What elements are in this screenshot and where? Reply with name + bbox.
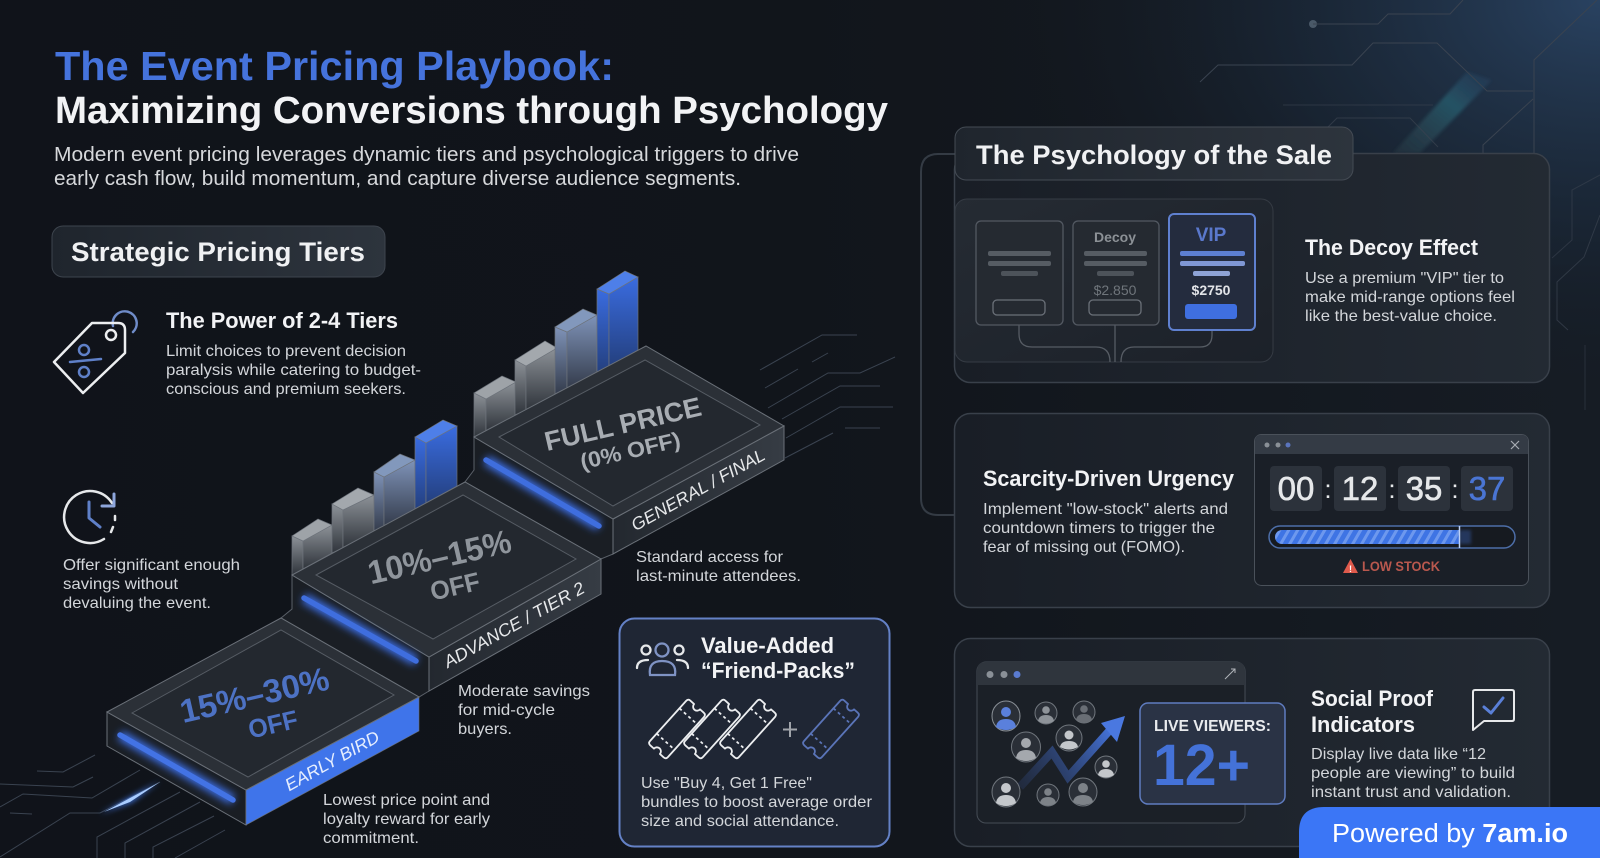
platform: early bird tier: OFF [245, 704, 301, 744]
timer digits: : [1388, 474, 1396, 504]
timer digits: 00 [1278, 470, 1314, 507]
card: decoy option: Decoy [1094, 229, 1136, 245]
platform: full price tier: (0% OFF) [578, 427, 683, 474]
card: decoy option [1073, 221, 1159, 325]
text: friend packs body [641, 775, 873, 830]
text: social proof [1311, 686, 1515, 801]
icon: tickets plus one free [648, 699, 860, 759]
subtitle text block: Modern event pricing leverages dynamic tiers and psychological triggers to drive [54, 143, 799, 166]
pricing table illustration [955, 199, 1273, 362]
text: friend packs body: size and social attendance. [641, 813, 839, 830]
platform: full price tier [465, 346, 784, 559]
browser window with avatars [977, 662, 1245, 823]
text: power of 2-4 tiers: Limit choices to prevent decision [166, 343, 406, 360]
text: scarcity: Implement "low-stock" alerts and [983, 501, 1228, 518]
text: early bird description [323, 792, 490, 847]
icon: verified chat bubble [1473, 690, 1514, 730]
title: The Event Pricing Playbook: [55, 43, 614, 89]
text: social proof: Display live data like “12 [1311, 746, 1486, 763]
card: basic option [976, 221, 1063, 325]
timer digits: 37 [1469, 470, 1505, 507]
callout: live viewers [1140, 703, 1285, 804]
text: savings note: Offer significant enough [63, 557, 240, 574]
text: decoy effect: like the best-value choice. [1305, 308, 1497, 325]
platform: full price tier: FULL PRICE [542, 392, 704, 457]
text: social proof: instant trust and validation. [1311, 784, 1511, 801]
text: friend packs heading: Value-Added [701, 633, 834, 658]
text: advance tier description: Moderate savings [458, 683, 590, 700]
heading: psychology of the sale: The Psychology of the Sale [976, 140, 1332, 170]
callout: live viewers: LIVE VIEWERS: [1154, 718, 1271, 735]
icon: group of people [637, 644, 688, 675]
callout: live viewers: 12+ [1153, 733, 1250, 798]
card: VIP option [1169, 214, 1255, 330]
platform: full price tier: GENERAL / FINAL [628, 445, 769, 535]
text: social proof: Indicators [1311, 712, 1415, 737]
rising trend arrow [1020, 716, 1125, 787]
text: general tier description: Standard access for [636, 549, 784, 566]
panel: social proof [954, 638, 1550, 846]
platform: advance tier: ADVANCE / TIER 2 [439, 578, 588, 672]
timer digits [1270, 466, 1513, 511]
timer digits: : [1324, 474, 1332, 504]
text: friend packs heading [701, 633, 855, 683]
text: decoy effect: make mid-range options feel [1305, 289, 1515, 306]
panel: scarcity urgency [954, 414, 1550, 608]
platform: early bird tier [107, 618, 419, 825]
heading: psychology of the sale [955, 127, 1353, 180]
text: scarcity: Scarcity-Driven Urgency [983, 466, 1235, 491]
panel: friend packs [620, 618, 890, 846]
platform: advance tier: 10%–15% [364, 522, 515, 591]
text: power of 2-4 tiers: conscious and premium seekers. [166, 381, 406, 398]
low stock alert: ! [1349, 564, 1352, 574]
text: savings note: devaluing the event. [63, 595, 211, 612]
text: decoy effect: Use a premium "VIP" tier to [1305, 270, 1504, 287]
text: general tier description [636, 549, 801, 585]
text: savings note [63, 557, 240, 612]
timer digits: 12 [1342, 470, 1378, 507]
text: friend packs body: bundles to boost average order [641, 794, 873, 811]
badge: powered by 7am.io [1299, 807, 1600, 858]
text: early bird description: loyalty reward for early [323, 811, 490, 828]
icon: clock [64, 491, 115, 543]
text: social proof: people are viewing” to build [1311, 765, 1515, 782]
countdown widget [1254, 434, 1528, 586]
badge: powered by 7am.io: Powered by 7am.io [1332, 820, 1568, 848]
platform: advance tier: OFF [427, 566, 483, 606]
text: advance tier description [458, 683, 590, 738]
text: friend packs body: Use "Buy 4, Get 1 Free" [641, 775, 812, 792]
text: advance tier description: for mid-cycle [458, 702, 555, 719]
text: scarcity: fear of missing out (FOMO). [983, 539, 1185, 556]
timer digits: 35 [1406, 470, 1442, 507]
text: decoy effect: The Decoy Effect [1305, 235, 1479, 260]
title [55, 43, 888, 132]
subtitle text block: early cash flow, build momentum, and capture diverse audience segments. [54, 167, 741, 190]
viewer avatars [992, 701, 1117, 807]
icon: price tag [54, 311, 137, 393]
text: savings note: savings without [63, 576, 179, 593]
platform: advance tier [281, 482, 601, 697]
chart: tier 2 ascending bars [292, 420, 457, 575]
text: scarcity [983, 466, 1235, 556]
text: early bird description: commitment. [323, 830, 419, 847]
chart: tier 3 ascending bars [474, 271, 638, 437]
text: early bird description: Lowest price point and [323, 792, 490, 809]
subtitle text block [54, 143, 799, 190]
panel: decoy effect [954, 127, 1550, 382]
text: friend packs heading: “Friend-Packs” [701, 658, 855, 683]
card: decoy option: $2.850 [1094, 282, 1137, 298]
bracket connecting psychology panels [921, 154, 955, 515]
stock progress bar [1269, 526, 1515, 548]
text: scarcity: countdown timers to trigger the [983, 520, 1215, 537]
text: power of 2-4 tiers: The Power of 2-4 Tiers [166, 308, 398, 333]
text: social proof: Social Proof [1311, 686, 1434, 711]
heading: strategic pricing tiers: Strategic Pricing Tiers [71, 237, 365, 267]
platform: early bird tier: EARLY BIRD [281, 726, 383, 795]
text: power of 2-4 tiers: paralysis while catering to budget- [166, 362, 421, 379]
text: advance tier description: buyers. [458, 721, 512, 738]
text: decoy effect [1305, 235, 1515, 325]
low stock alert: LOW STOCK [1362, 558, 1440, 574]
card: VIP option: $2750 [1192, 282, 1231, 298]
platform: early bird tier: 15%–30% [176, 660, 333, 730]
text: general tier description: last-minute attendees. [636, 568, 801, 585]
title: Maximizing Conversions through Psychology [55, 90, 888, 132]
heading: strategic pricing tiers [52, 226, 385, 277]
timer digits: : [1451, 474, 1459, 504]
text: power of 2-4 tiers [166, 308, 421, 398]
card: VIP option: VIP [1196, 225, 1227, 246]
